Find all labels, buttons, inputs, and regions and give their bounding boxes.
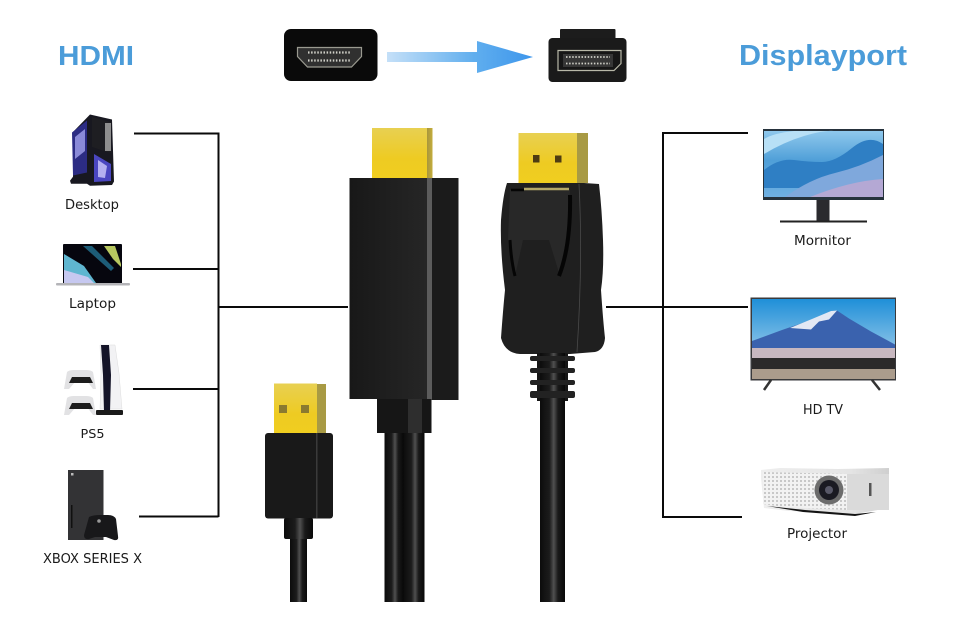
Displayport plug xyxy=(501,133,605,602)
USB strain relief xyxy=(284,518,313,539)
Displayport plug body xyxy=(501,183,605,354)
device: Monitor xyxy=(763,129,884,249)
gold USB tip xyxy=(274,384,326,434)
label: Mornitor: Mornitor xyxy=(794,234,852,249)
connector lines: HDMI devices xyxy=(133,134,348,517)
icon: Displayport port xyxy=(548,29,626,82)
HDMI strain relief xyxy=(377,399,432,433)
device: Xbox Series X xyxy=(43,470,142,567)
HDMI plug xyxy=(350,128,458,602)
device: Desktop xyxy=(65,114,119,213)
heading: HDMI: HDMI xyxy=(58,40,134,71)
gold HDMI tip xyxy=(372,128,432,179)
label: PS5: PS5 xyxy=(80,426,104,441)
icon: monitor xyxy=(763,129,884,222)
label: Projector: Projector xyxy=(787,527,848,542)
Displayport cable xyxy=(540,399,565,602)
label: XBOX SERIES X: XBOX SERIES X xyxy=(43,552,142,567)
label: Laptop: Laptop xyxy=(69,297,116,312)
USB cable xyxy=(290,539,307,602)
USB plug body xyxy=(265,433,333,518)
icon: HDMI port xyxy=(284,29,378,81)
icon: television xyxy=(750,298,896,390)
Displayport ribbed strain relief xyxy=(530,353,575,401)
twin HDMI cables xyxy=(384,433,424,602)
icon: laptop xyxy=(56,244,130,286)
icon: PS5 console and controllers xyxy=(64,345,123,415)
icon: Xbox console and controller xyxy=(68,470,118,540)
label: HD TV: HD TV xyxy=(803,403,843,418)
icon: projector xyxy=(761,468,889,516)
gold Displayport tip xyxy=(518,133,588,183)
USB plug xyxy=(265,384,333,602)
connector lines: Displayport devices xyxy=(606,133,748,517)
Displayport latch xyxy=(508,184,581,352)
icon: desktop tower xyxy=(70,114,114,186)
heading: Displayport: Displayport xyxy=(739,40,907,72)
arrow: HDMI to Displayport xyxy=(387,41,533,73)
HDMI plug body xyxy=(350,178,458,400)
device: Projector xyxy=(761,468,889,542)
device: PS5 xyxy=(64,345,123,441)
label: Desktop: Desktop xyxy=(65,198,119,213)
device: HD TV xyxy=(750,298,896,418)
device: Laptop xyxy=(56,244,130,312)
